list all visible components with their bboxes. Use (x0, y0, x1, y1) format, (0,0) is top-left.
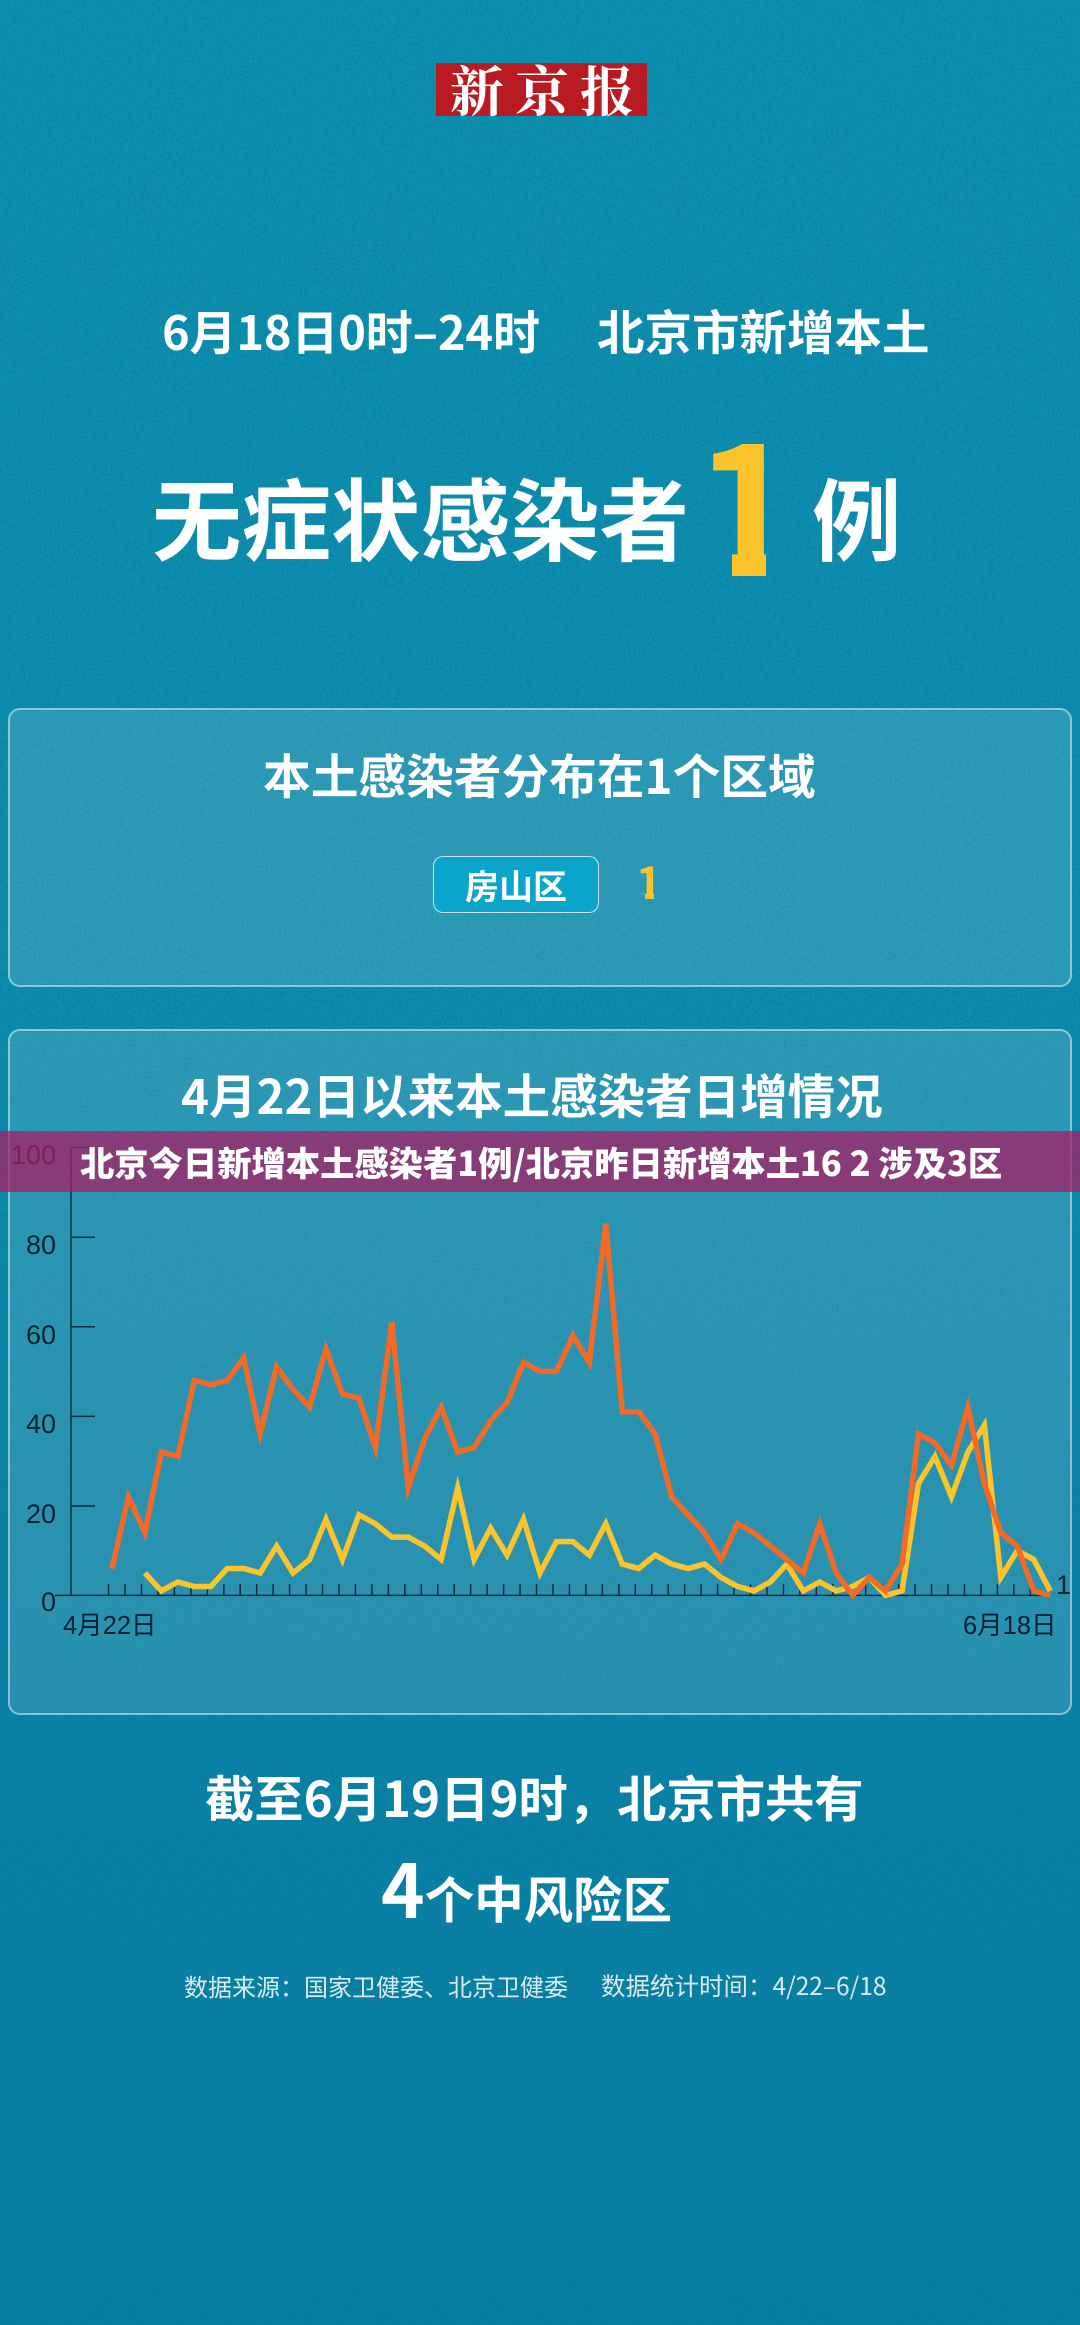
overlay headline band (0, 1131, 1080, 1192)
x axis labels: 6月18日 (963, 1612, 1057, 1640)
logo: 新京报: 新京报 (450, 50, 645, 127)
headline number 1: 1 (694, 367, 800, 628)
closing line: as of date: 截至6月19日9时，北京市共有 (205, 1761, 864, 1832)
district pill: Fangshan: 房山区 (465, 860, 567, 909)
x axis labels: 1 (1056, 1570, 1071, 1600)
y axis labels: 40 (26, 1409, 56, 1439)
district pill: Fangshan (433, 856, 599, 913)
y axis labels: 0 (41, 1587, 56, 1617)
y axis labels (11, 1140, 56, 1617)
panel: daily increase chart (8, 1029, 1072, 1715)
panel heading: distribution: 本土感染者分布在1个区域 (263, 739, 816, 808)
x axis labels (63, 1570, 1071, 1640)
closing line: medium risk areas: 4个中风险区 (381, 1833, 672, 1940)
series: orange line (112, 1224, 1050, 1595)
logo: 新京报 (436, 63, 647, 116)
heading: date range: 6月18日0时–24时 (162, 295, 540, 364)
source note: 数据来源：国家卫健委、北京卫健委 (184, 1968, 568, 2003)
x axis labels: 4月22日 (63, 1612, 157, 1640)
panel heading: daily increase: 4月22日以来本土感染者日增情况 (181, 1059, 883, 1128)
series: yellow line (145, 1425, 1050, 1595)
district count: 1 (636, 848, 662, 912)
y axis labels: 80 (26, 1230, 56, 1260)
band text: 北京今日新增本土感染者1例/北京昨日新增本土16 2 涉及3区 (80, 1136, 1002, 1186)
chart axes and ticks (55, 1148, 1050, 1595)
y axis labels: 100 (11, 1140, 56, 1170)
statistics period note: 数据统计时间：4/22–6/18 (601, 1968, 886, 2003)
panel: distribution (8, 708, 1072, 987)
heading: Beijing new local: 北京市新增本土 (597, 295, 930, 364)
y axis labels: 60 (26, 1320, 56, 1350)
y axis labels: 20 (26, 1499, 56, 1529)
headline unit: 例 (812, 450, 902, 580)
headline: asymptomatic cases: 无症状感染者 (152, 450, 689, 580)
